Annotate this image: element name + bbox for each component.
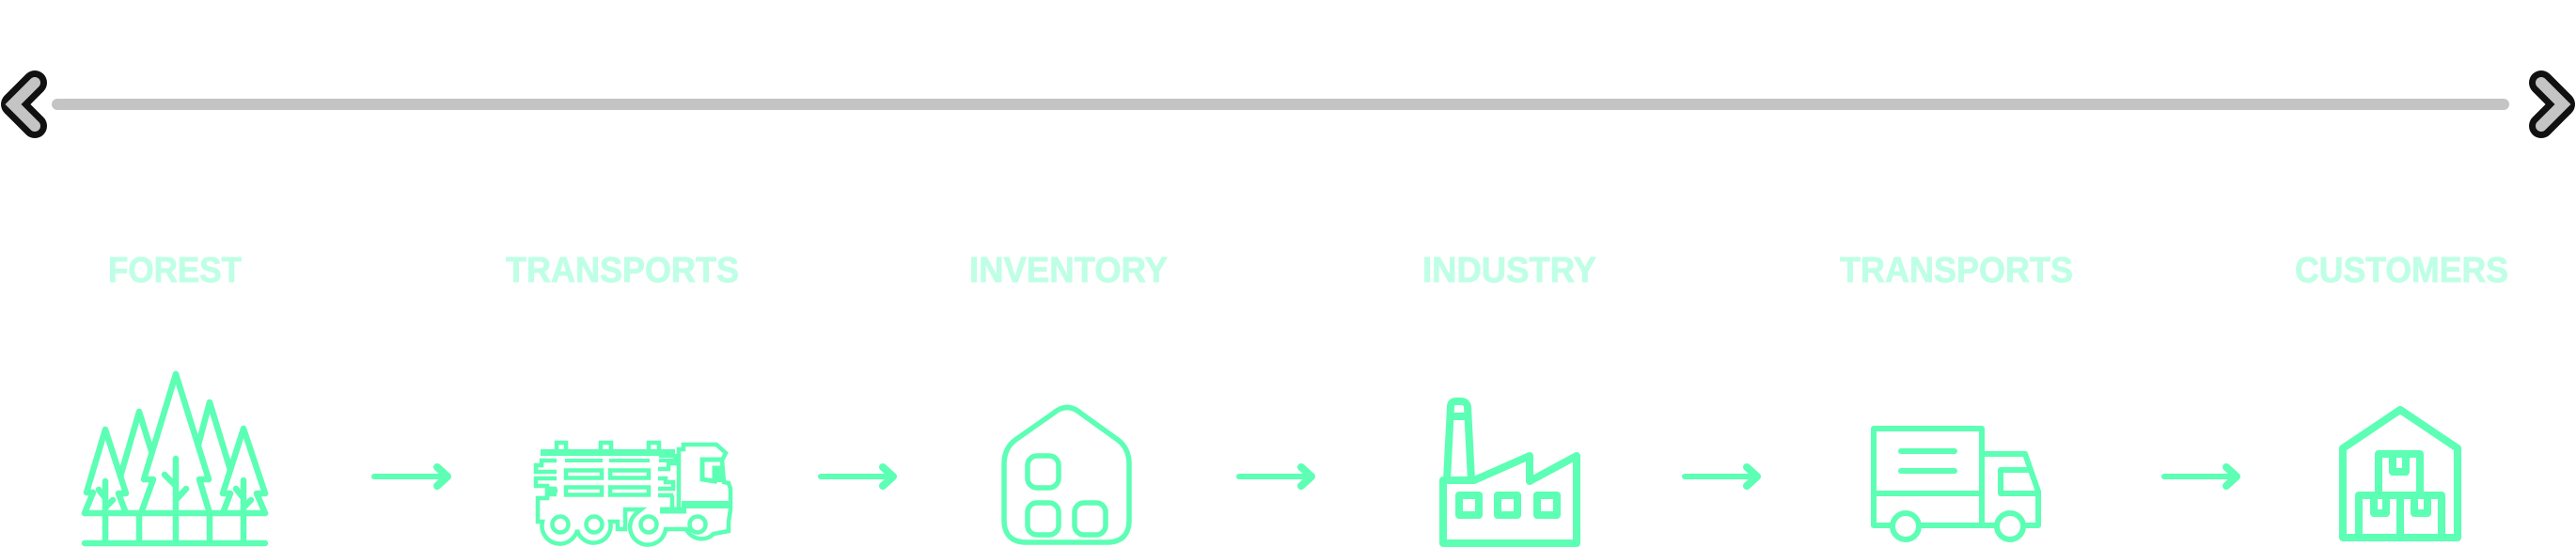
label: industry: INDUSTRY (1422, 251, 1596, 290)
stage labels (108, 251, 2508, 290)
icon: forest (85, 374, 265, 543)
label: transports: TRANSPORTS (1840, 251, 2073, 290)
icon: customers warehouse (2343, 410, 2458, 538)
arrow: industry to transports (1685, 467, 1757, 486)
timeline slider (13, 83, 2563, 126)
timeline bar (52, 99, 2509, 110)
label: transports: TRANSPORTS (506, 251, 739, 290)
label: customers: CUSTOMERS (2295, 251, 2508, 290)
arrow: forest to transports (374, 467, 448, 486)
label: forest: FOREST (108, 251, 242, 290)
arrow: transports to inventory (821, 467, 893, 486)
icon: inventory house (1004, 408, 1129, 542)
icon: factory (1443, 401, 1577, 543)
arrow: transports to customers (2164, 467, 2237, 486)
icon: delivery truck (1874, 429, 2038, 539)
icon: left chevron (13, 83, 35, 126)
arrow: inventory to industry (1239, 467, 1312, 486)
label: inventory: INVENTORY (969, 251, 1168, 290)
icon: right chevron (2541, 83, 2563, 126)
icon: log truck (536, 443, 730, 545)
